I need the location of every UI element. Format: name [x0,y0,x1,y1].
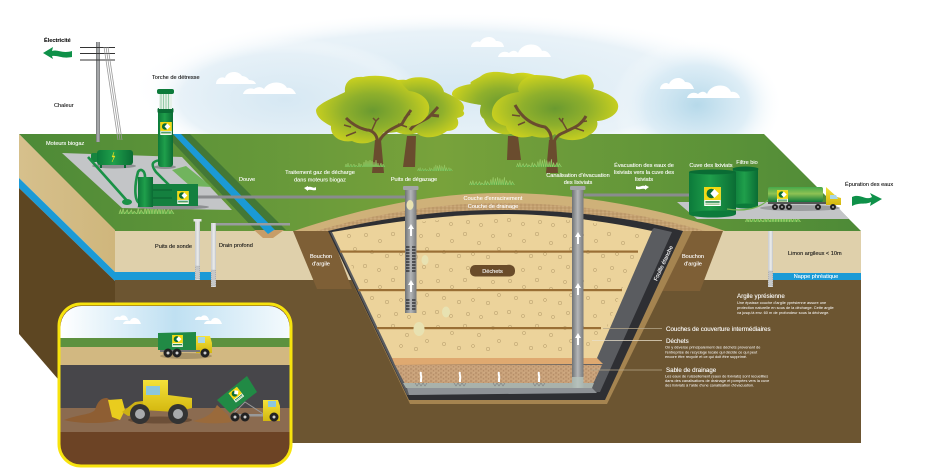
right monitoring well [768,231,773,287]
gas flow arrow [304,186,316,191]
tanker truck [760,187,841,211]
text block: drainage sand: dans des canalisations de drainage et pompées vers la cuve [665,378,769,383]
label: leachate pipe: des lixiviats [564,180,592,186]
water treatment arrow [852,193,882,206]
mound root layer [294,193,725,231]
waste label pill [470,265,515,276]
trees [316,72,618,173]
leachate riser pipe [570,186,586,388]
clay plug right [660,231,723,291]
leachate tank [689,170,736,218]
leader lines [591,328,662,370]
label: silty clay: Limon argileux < 10m [788,251,842,257]
label: drainage layer: Couche de drainage [468,204,518,210]
pit tan outer lining [328,231,692,404]
label: heat: Chaleur [54,103,74,109]
label: clay plug left: Bouchon [310,254,332,260]
clay plug left [293,231,352,289]
text block: ypresian clay: Argile yprésienne [737,293,785,300]
label: gas treatment: dans moteurs biogaz [294,178,346,184]
landfill cell [293,193,725,404]
text block: ypresian clay: va jusqu'à env. 60 m de profondeur sous la décharge. [737,310,829,315]
text block: waste: Déchets [666,338,689,345]
flare stack [154,89,176,169]
gas extraction well [403,186,418,313]
pad grass [172,166,212,187]
text block: waste: On y déverse principalement des déchets provenant de [665,344,760,350]
tree back left [374,77,464,167]
inset clouds [114,315,222,324]
ground: front cut face [115,231,861,443]
tanker hose [727,200,768,210]
label: water treatment: Épuration des eaux [845,181,893,188]
lower liner stripes [407,388,597,395]
biogas plant pad [62,153,232,210]
waste fill [332,214,652,358]
drainage water band [403,383,594,388]
orange sub layer [392,358,603,365]
text block: waste: encore être recyclé et ce qui doit être supprimé. [665,354,747,359]
label: electricity: Électricité [44,36,71,44]
leachate plant pad [677,202,849,219]
inset: dirt pile right [193,405,232,423]
inset: tipper truck [217,376,280,422]
electricity pole [80,42,122,142]
inset: collection truck [158,332,212,359]
text block: ypresian clay: protection naturelle en sous de la décharge. Cette argile [737,305,834,310]
text block: drainage sand [665,367,769,388]
electricity arrow [43,47,72,59]
text block: drainage sand: des lixiviats à l'aide d'une canalisation d'évacuation. [665,382,754,388]
label: sealed excavation: Fouille étanche [653,245,675,282]
text block: waste: l'entreprise de recyclage locale qui décide ce qui peut [665,350,758,354]
text block: ypresian clay: Une épaisse couche d'argile yprésienne assure une [737,300,826,305]
label: biogas engines: Moteurs biogaz [46,141,84,147]
label: leachate tank: Cuve des lixiviats [689,163,733,169]
label: water table: Nappe phréatique [794,274,838,280]
label: gas treatment: Traitement gaz de décharge [285,170,355,176]
text block: waste [665,338,760,359]
inset panel: landfill operations [59,304,291,466]
intermediate cover layers [340,250,638,329]
biogas piping [88,157,176,203]
probe well [194,219,202,280]
label: ditch: Douve [239,177,255,183]
grass tufts [119,159,800,222]
sky backdrop [130,12,810,171]
excavation grey lining [330,228,672,395]
text block: drainage sand: Sable de drainage [666,367,717,374]
label: flare: Torche de détresse [152,75,200,81]
inset: dirt pile left [64,398,120,423]
label: clay plug right: d'argile [684,262,702,268]
deep drain pipe [211,223,290,287]
label: deep drain: Drain profond [219,243,253,249]
gas collection pipe [198,196,405,198]
gas bubbles [406,200,450,336]
label: probe well: Puits de sonde [155,244,192,250]
label: leachate discharge: lixiviats vers la cuve des [614,170,674,176]
label: leachate discharge: lixiviats [635,177,653,183]
pit dark lining [328,210,683,400]
waste rocks texture [336,217,645,352]
ground: left cut face [19,134,115,445]
leachate flow arrow [636,185,649,190]
mound drainage layer [316,203,705,231]
ground: grass surface [19,134,861,231]
label: root layer: Couche d'enracinement [464,196,523,202]
ditch [165,134,286,238]
tree front right [492,74,618,173]
label: clay plug right: Bouchon [682,254,704,260]
inset sky [60,306,290,338]
text block: drainage sand: Les eaux de ruissellement (eaux de lixiviats) sont recueillies [665,374,768,378]
waste label pill: Déchets [482,269,503,275]
label: intermediate layers: Couches de couverture intermédiaires [666,326,771,333]
drainage sand [395,365,602,384]
clouds [216,37,740,98]
label: biofilter: Filtre bio [736,160,758,166]
biogas engine [91,150,136,168]
drain sources [415,372,545,386]
label: leachate discharge: Évacuation des eaux de [614,163,674,169]
label: clay plug left: d'argile [312,262,330,268]
text block: ypresian clay [737,293,834,315]
label: gas well: Puits de dégazage [391,177,437,183]
tree back right [452,72,553,160]
biofilter tank [732,166,758,208]
inset: compactor [108,380,192,424]
tree front left [316,76,429,173]
label: leachate pipe: Canalisation d'évacuation [546,173,610,179]
cogeneration unit [122,177,209,210]
leachate discharge pipe [584,194,692,196]
